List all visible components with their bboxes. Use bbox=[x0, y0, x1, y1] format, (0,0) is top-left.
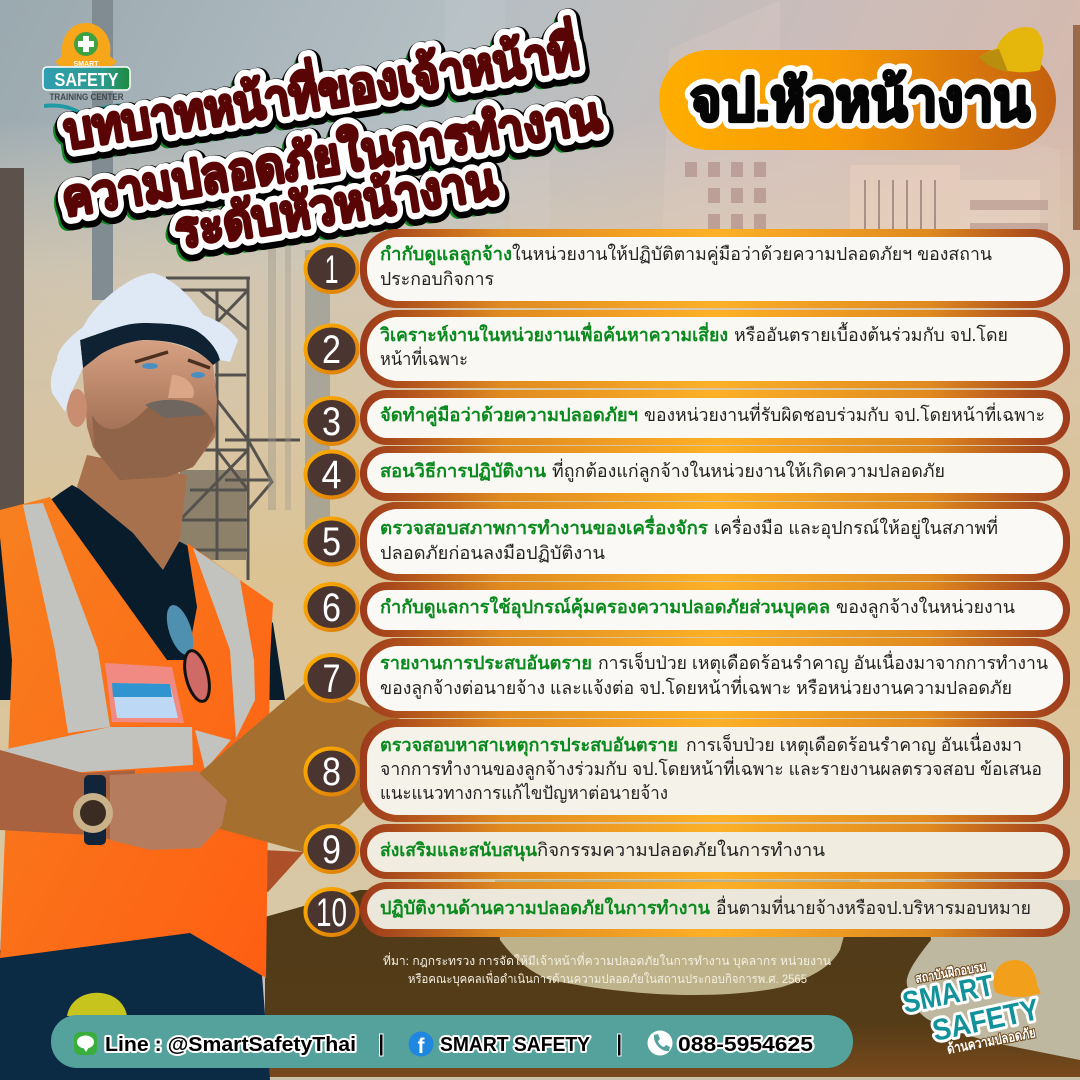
item 3 bbox=[306, 390, 1070, 445]
item 1 bbox=[306, 229, 1070, 308]
source note: หรือคณะบุคคลเพื่อดำเนินการด้านความปลอดภัยในสถานประกอบกิจการพ.ศ. 2565 bbox=[408, 970, 807, 987]
title green edge bbox=[55, 22, 602, 265]
jeans bbox=[0, 930, 270, 1080]
title shadow: ความปลอดภัยในการทำงาน bbox=[59, 88, 606, 230]
phone number: 088-5954625 bbox=[678, 1034, 813, 1056]
item 6: 6 bbox=[322, 586, 341, 630]
facebook account: SMART SAFETY bbox=[440, 1034, 591, 1056]
item 10: ปฏิบัติงานด้านความปลอดภัยในการทำงาน bbox=[380, 897, 711, 918]
item 5 bbox=[306, 502, 1070, 581]
item 5: ตรวจสอบสภาพการทำงานของเครื่องจักร bbox=[380, 515, 708, 538]
item 1: กำกับดูแลลูกจ้าง bbox=[380, 244, 512, 266]
item 2: หน้าที่เฉพาะ bbox=[380, 346, 468, 369]
small caption top: สถาบันฝึกอบรม bbox=[914, 959, 987, 986]
item 5: เครื่องมือ และอุปกรณ์ให้อยู่ในสภาพที่ bbox=[714, 515, 998, 539]
right forearm bbox=[262, 850, 304, 892]
icon: orange hard hat bbox=[994, 960, 1041, 997]
item 4: 4 bbox=[322, 453, 342, 497]
background: wooden table bbox=[265, 890, 1080, 1080]
contact bar bbox=[51, 1015, 853, 1068]
title white outline: บทบาทหน้าที่ของเจ้าหน้าที่ bbox=[59, 16, 582, 160]
item 2: 2 bbox=[322, 328, 341, 372]
title shadow: บทบาทหน้าที่ของเจ้าหน้าที่ bbox=[60, 19, 583, 163]
source note bbox=[383, 952, 831, 987]
vest reflective strips bbox=[2, 503, 255, 773]
item 2: หรืออันตรายเบื้องต้นร่วมกับ จป.โดย bbox=[734, 322, 1008, 345]
logo: Smart Safety Training Center bbox=[43, 23, 130, 117]
shirt bbox=[0, 485, 285, 700]
icon: facebook: f bbox=[418, 1035, 426, 1058]
clipboard bbox=[197, 683, 430, 852]
background: second hard hat on table bbox=[907, 880, 1080, 1060]
item 6: ของลูกจ้างในหน่วยงาน bbox=[836, 596, 1015, 618]
logo book bbox=[44, 103, 129, 117]
item 9 bbox=[306, 824, 1070, 879]
title bbox=[55, 16, 606, 265]
item 8: ตรวจสอบหาสาเหตุการประสบอันตราย bbox=[380, 735, 678, 757]
title green edge: ความปลอดภัยในการทำงาน bbox=[55, 91, 602, 233]
title white outline bbox=[58, 16, 605, 259]
background: steel scaffold tower bbox=[166, 278, 300, 580]
line account: Line : @SmartSafetyThai bbox=[105, 1034, 356, 1056]
badge label: จป.หัวหน้างาน bbox=[690, 68, 1030, 133]
item 3: จัดทำคู่มือว่าด้วยความปลอดภัยฯ bbox=[380, 405, 638, 427]
title text: ระดับหัวหน้างาน bbox=[171, 153, 501, 259]
item 8 bbox=[306, 719, 1070, 822]
logo helmet bbox=[55, 23, 117, 66]
item 5: 5 bbox=[322, 520, 341, 564]
icon: facebook bbox=[408, 1032, 434, 1058]
item 7: 7 bbox=[322, 657, 340, 701]
item 4 bbox=[306, 446, 1070, 501]
title white outline: ความปลอดภัยในการทำงาน bbox=[58, 85, 605, 227]
logo small word: SMART bbox=[74, 61, 99, 68]
yellow tape measure bbox=[67, 993, 127, 1016]
wordmark SMART: SMART bbox=[900, 969, 997, 1020]
item 6: กำกับดูแลการใช้อุปกรณ์คุ้มครองความปลอดภัยส่วนบุคคล bbox=[380, 596, 830, 619]
icon: line bbox=[74, 1032, 97, 1055]
arm bbox=[0, 750, 135, 845]
item 2 bbox=[306, 310, 1070, 388]
item 7: รายงานการประสบอันตราย bbox=[380, 653, 592, 673]
ID badge bbox=[105, 663, 184, 723]
bar background bbox=[51, 1015, 853, 1068]
title shadow: ระดับหัวหน้างาน bbox=[172, 156, 502, 262]
item 1: 1 bbox=[324, 248, 338, 292]
logo safety plate: SAFETY bbox=[54, 70, 118, 90]
title text: ความปลอดภัยในการทำงาน bbox=[58, 85, 605, 227]
head: ear bbox=[67, 389, 87, 427]
item 1: ประกอบกิจการ bbox=[380, 269, 494, 289]
white hard hat bbox=[51, 273, 238, 412]
item 8: แนะแนวทางการแก้ไขปัญหาต่อนายจ้าง bbox=[380, 782, 668, 803]
source note: ที่มา: กฎกระทรวง การจัดให้มีเจ้าหน้าที่ความปลอดภัยในการทำงาน บุคลากร หน่วยงาน bbox=[383, 952, 831, 969]
sunglasses bbox=[162, 602, 214, 704]
item 4: ที่ถูกต้องแก่ลูกจ้างในหน่วยงานให้เกิดความปลอดภัย bbox=[552, 458, 945, 482]
background: central mast bbox=[92, 0, 113, 300]
item 7: ของลูกจ้างต่อนายจ้าง และแจ้งต่อ จป.โดยหน้าที่เฉพาะ หรือหน่วยงานความปลอดภัย bbox=[380, 675, 1012, 699]
item 4: สอนวิธีการปฏิบัติงาน bbox=[380, 461, 547, 481]
item 1: ในหน่วยงานให้ปฏิบัติตามคู่มือว่าด้วยความปลอดภัยฯ ของสถาน bbox=[512, 243, 992, 265]
item 6 bbox=[306, 582, 1070, 637]
item 10: อื่นตามที่นายจ้างหรือจป.บริหารมอบหมาย bbox=[716, 895, 1031, 918]
item 3: 3 bbox=[322, 400, 341, 444]
item 10 bbox=[306, 882, 1070, 937]
background: white hard hat brim on table bbox=[495, 880, 860, 995]
title shadow bbox=[59, 19, 606, 262]
small caption bottom: ด้านความปลอดภัย bbox=[946, 1024, 1037, 1057]
item 9: ส่งเสริมและสนับสนุน bbox=[380, 840, 538, 862]
item 8: การเจ็บป่วย เหตุเดือดร้อนรำคาญ อันเนื่องมา bbox=[686, 732, 1022, 756]
separator bbox=[618, 1034, 621, 1056]
separator bbox=[380, 1034, 383, 1056]
role badge bbox=[659, 27, 1056, 150]
item 7 bbox=[306, 638, 1070, 718]
title green edge: บทบาทหน้าที่ของเจ้าหน้าที่ bbox=[56, 22, 579, 166]
item 3: ของหน่วยงานที่รับผิดชอบร่วมกับ จป.โดยหน้าที่เฉพาะ bbox=[644, 402, 1045, 425]
list of duties bbox=[306, 229, 1070, 937]
orange vest body bbox=[0, 497, 273, 978]
item 9: กิจกรรมความปลอดภัยในการทำงาน bbox=[537, 839, 825, 860]
item 8: จากการทำงานของลูกจ้างร่วมกับ จป.โดยหน้าที่เฉพาะ และรายงานผลตรวจสอบ ข้อเสนอ bbox=[380, 756, 1042, 780]
hard hat band bbox=[80, 323, 220, 368]
title text bbox=[58, 16, 605, 259]
badge pill bbox=[659, 50, 1056, 150]
background: bottom edge strip bbox=[265, 1077, 1080, 1080]
item 8: 8 bbox=[322, 750, 341, 794]
item 5: ปลอดภัยก่อนลงมือปฏิบัติงาน bbox=[380, 543, 605, 563]
icon: yellow hard hat bbox=[979, 27, 1043, 72]
hand bbox=[110, 771, 227, 850]
head: face bbox=[82, 340, 217, 480]
logo: Smart Safety bottom right bbox=[900, 959, 1042, 1057]
logo subtitle: TRAINING CENTER bbox=[50, 92, 124, 103]
photo: safety officer bbox=[0, 273, 430, 1080]
title green edge: ระดับหัวหน้างาน bbox=[168, 159, 498, 265]
logo green cross bbox=[74, 32, 98, 56]
title text: บทบาทหน้าที่ของเจ้าหน้าที่ bbox=[59, 16, 582, 160]
head: eyes and nose bbox=[135, 352, 210, 398]
icon: phone bbox=[648, 1030, 672, 1056]
wrist watch bbox=[73, 775, 113, 845]
item 10: 10 bbox=[316, 891, 347, 935]
title white outline: ระดับหัวหน้างาน bbox=[171, 153, 501, 259]
background: right pipe bbox=[1073, 25, 1080, 230]
wordmark SAFETY: SAFETY bbox=[930, 993, 1042, 1048]
background: pale city buildings bbox=[445, 0, 1060, 300]
background: left chimney bbox=[0, 168, 24, 510]
neck bbox=[77, 455, 187, 570]
badge label outline: จป.หัวหน้างาน bbox=[690, 68, 1030, 133]
item 9: 9 bbox=[322, 828, 341, 872]
item 2: วิเคราะห์งานในหน่วยงานเพื่อค้นหาความเสี่ยง bbox=[379, 322, 728, 345]
item 7: การเจ็บป่วย เหตุเดือดร้อนรำคาญ อันเนื่องมาจากการทำงาน bbox=[598, 650, 1048, 674]
head: beard bbox=[92, 400, 215, 480]
